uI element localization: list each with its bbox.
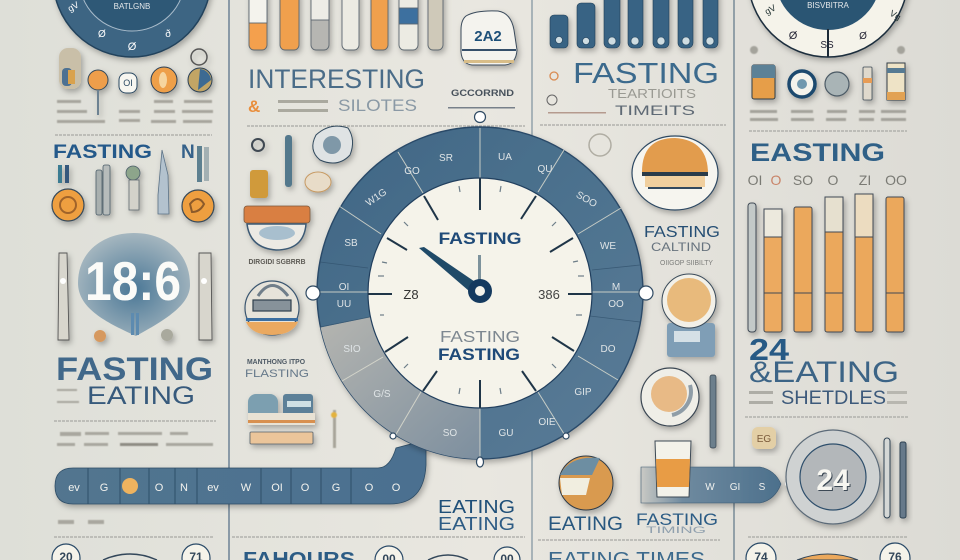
- dial labels: FASTING: [440, 329, 520, 346]
- heading: 24 and eating schedules: SHETDLES: [781, 388, 886, 409]
- icon: small badge: [752, 427, 776, 449]
- ring labels: SOO: [574, 190, 599, 210]
- icon: plate with device: [662, 274, 716, 357]
- panel: central dial: [306, 112, 653, 467]
- text: scale caption: [245, 357, 309, 380]
- dial labels: 386: [538, 287, 560, 302]
- ring labels: OO: [608, 299, 624, 310]
- panel: top-right dial: Vg: [888, 8, 903, 22]
- heading: fasting timers: TEARTIOITS: [608, 86, 696, 101]
- panel: bottom timeline bar: ev: [207, 482, 219, 494]
- icon: 24 plate: 24: [816, 464, 850, 497]
- panel: bottom timeline bar: G: [332, 482, 340, 494]
- ring labels: UU: [337, 299, 351, 310]
- ring labels: WE: [600, 241, 616, 252]
- dial ring: [317, 127, 643, 459]
- panel: top-left dial: Ø: [98, 29, 106, 40]
- icon: scale: [245, 281, 299, 335]
- text: food caption: DIRGIDI SGBRRB: [248, 259, 306, 266]
- panel: bottom timeline bar: [55, 440, 426, 504]
- heading: fasting timers: [547, 58, 719, 156]
- icon: glass and right timeline bar: W: [705, 482, 715, 493]
- text: fasting caption: CALTIND: [651, 240, 711, 254]
- heading: easting: SO: [793, 172, 813, 188]
- icons: side utensils: [58, 253, 212, 342]
- heading: easting: O: [771, 172, 782, 188]
- icon: 24 plate: 24: [817, 465, 851, 498]
- heading: interesting slotes: INTERESTING: [248, 64, 425, 94]
- badge: 2A2: 2A2: [474, 28, 502, 45]
- heading: bottom fahours: [243, 549, 705, 560]
- ring dividers: [317, 128, 643, 460]
- ring labels: GO: [404, 166, 420, 177]
- ring labels: DO: [600, 344, 616, 355]
- dial face: [368, 178, 592, 408]
- panel: bottom row clocks: [52, 543, 910, 560]
- text: eating labels: TIMING: [646, 525, 706, 535]
- text: eating labels: EATING: [438, 514, 515, 534]
- text: right icon captions: [750, 46, 906, 121]
- dial labels: [403, 229, 560, 364]
- panel: top blue bars: [550, 0, 718, 48]
- panel: top-right dial: gV: [763, 3, 778, 17]
- icons: utensils and orange medallions: [52, 150, 214, 222]
- panel: top-left dial: Ø: [128, 41, 137, 53]
- heading: interesting slotes: [248, 64, 515, 116]
- chart: right orange bars: [748, 194, 904, 332]
- text: eating labels: EATING: [548, 514, 623, 535]
- panel: left-center food icons: [244, 126, 353, 250]
- heading: easting: OO: [885, 172, 907, 188]
- icon: glass and right timeline bar: GI: [730, 482, 740, 493]
- gray eating segment: [321, 317, 480, 459]
- major ticks: [368, 178, 592, 408]
- panel: top-right dial: [748, 0, 908, 57]
- ring labels: SIO: [343, 344, 361, 355]
- ring labels: OIE: [538, 417, 556, 428]
- icon: 24 plate: [786, 430, 880, 524]
- text: fasting caption: [644, 224, 720, 267]
- heading: 24 and eating schedules: &EATING: [749, 356, 899, 389]
- panel: top-left dial: [53, 0, 211, 57]
- ring labels: GU: [498, 428, 514, 439]
- icon: books: [248, 394, 315, 444]
- clock hands: [419, 247, 492, 303]
- heading: interesting slotes: SILOTES: [338, 96, 417, 115]
- panel: bottom timeline bar: G: [100, 482, 108, 494]
- heading: easting: [748, 139, 907, 188]
- ring labels: OI: [339, 282, 349, 293]
- ring labels: SR: [439, 153, 453, 164]
- ring labels: SB: [344, 238, 358, 249]
- panel: bottom timeline bar: O: [301, 482, 310, 494]
- icon: glass and right timeline bar: [641, 441, 799, 503]
- text: eating labels: FASTING: [636, 510, 718, 529]
- text: scale caption: MANTHONG ITPO: [247, 357, 305, 366]
- panel: top-left dial: BATLGNB: [114, 2, 150, 11]
- icon: burger plate: [632, 136, 718, 210]
- text: fasting caption: OIIGOP SIIBILTY: [660, 260, 713, 267]
- dial labels: FASTING: [438, 345, 520, 364]
- panel: right icon row: [752, 63, 905, 100]
- panel: top-right dial: SS: [820, 40, 834, 51]
- panel: bottom timeline bar: O: [155, 482, 164, 494]
- heading: easting: OI: [748, 172, 762, 188]
- panel: top-right dial: Ø: [859, 31, 867, 42]
- panel: left icon row: [59, 48, 212, 115]
- panel: top orange and gray bars: [249, 0, 443, 50]
- text: small notes: [57, 389, 213, 524]
- heading: easting: O: [828, 172, 839, 188]
- heading: fasting eating: EATING: [87, 382, 195, 410]
- ring labels: QU: [538, 164, 552, 175]
- heading: interesting slotes: &: [248, 97, 260, 116]
- heading: easting: ZI: [859, 172, 871, 188]
- badge: 18:6: 18:6: [85, 250, 181, 312]
- heading: fasting eating: FASTING: [56, 351, 213, 387]
- half dial: right: [797, 554, 858, 560]
- ring labels: G/S: [373, 389, 391, 400]
- panel: bottom timeline bar: ev: [68, 482, 80, 494]
- panel: top-left dial: ð: [165, 28, 171, 40]
- panel: bottom timeline bar: W: [241, 482, 252, 494]
- icon: small timer marker: [331, 410, 337, 448]
- ring pins: [306, 112, 653, 467]
- ring labels: GIP: [574, 387, 592, 398]
- panel: left icon row: OI: [123, 78, 133, 88]
- icon: food bowl: [559, 456, 613, 510]
- text: scale caption: FLASTING: [245, 368, 309, 380]
- heading: left fasting: N: [181, 142, 195, 163]
- icon: fork and knife: [884, 438, 906, 518]
- heading: 24 and eating schedules: 24: [749, 332, 790, 367]
- panel: bottom timeline bar: O: [392, 482, 401, 494]
- ring labels: M: [612, 282, 620, 293]
- panel: bottom timeline bar: N: [180, 482, 188, 494]
- minor ticks: [378, 186, 584, 394]
- icon: glass and right timeline bar: S: [759, 482, 766, 493]
- panel: top-right dial: BISVBITRA: [807, 1, 850, 10]
- heading: fasting timers: FASTING: [573, 58, 719, 90]
- ring labels: UA: [498, 152, 512, 163]
- half dial: center: [428, 555, 468, 560]
- icon: plate and knife: [641, 368, 716, 448]
- badge: 2A2: [461, 11, 517, 65]
- heading: fasting eating: [56, 351, 213, 410]
- panel: bottom timeline bar: OI: [271, 482, 283, 494]
- heading: 24 and eating schedules: [749, 332, 907, 409]
- text: fasting caption: FASTING: [644, 224, 720, 241]
- heading: interesting slotes: GCCORRND: [451, 88, 515, 98]
- badge: 18:6: [78, 233, 190, 336]
- ring labels: [337, 152, 624, 439]
- heading: left fasting: [53, 142, 209, 182]
- ring labels: W1G: [364, 187, 389, 209]
- panel: top-right dial: Ø: [789, 30, 798, 42]
- text: eating labels: EATING: [438, 497, 515, 517]
- heading: left fasting: FASTING: [53, 142, 152, 163]
- labels: bottom numbers: [59, 550, 902, 560]
- heading: easting: EASTING: [750, 139, 885, 167]
- dial labels: Z8: [403, 287, 419, 302]
- text: left icon captions: [57, 100, 213, 123]
- half dial: left: [103, 554, 157, 560]
- badge: 20: [52, 543, 910, 560]
- dial labels: FASTING: [438, 229, 522, 248]
- ring labels: SO: [443, 428, 457, 439]
- text: eating labels: [438, 497, 718, 535]
- icon: small badge: EG: [757, 434, 771, 445]
- panel: bottom timeline bar: O: [365, 482, 374, 494]
- heading: fasting timers: TIMEITS: [615, 102, 695, 118]
